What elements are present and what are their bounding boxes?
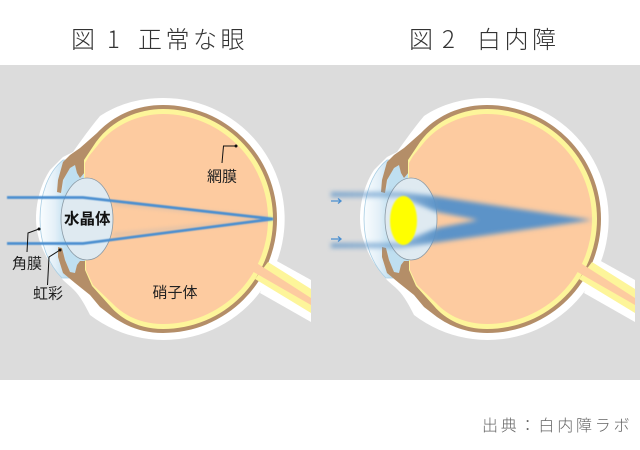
title: figure 1: 図 [71,20,98,55]
arrow: lower incoming light [331,236,341,242]
label: vitreous body: 硝子体 [152,284,198,302]
label: cornea with leader [12,228,42,272]
arrow: upper incoming light [331,198,341,204]
light rays converging on retina [7,198,273,244]
label: iris with leader [33,248,63,302]
title: figure 1: 1 [107,20,123,55]
panel: grey background [0,65,640,380]
cataract: cloudy yellow lens [390,196,417,245]
label: lens: 水晶体 [64,210,111,228]
title: figure 2: 白内障 [477,20,560,55]
label: cornea with leader: 角膜 [12,256,42,272]
label: retina with leader [207,144,238,186]
label: iris with leader: 虹彩 [33,286,63,302]
source credit: 出典：白内障ラボ [482,417,632,435]
title: figure 1: 正常な眼 [138,20,248,55]
title: figure 2: 2 [442,20,458,55]
scattered light rays [331,192,592,248]
diagram: normal eye [7,98,311,340]
diagram: cataract eye [331,98,635,340]
label: retina with leader: 網膜 [207,168,237,186]
title: figure 2: 図 [409,20,436,55]
